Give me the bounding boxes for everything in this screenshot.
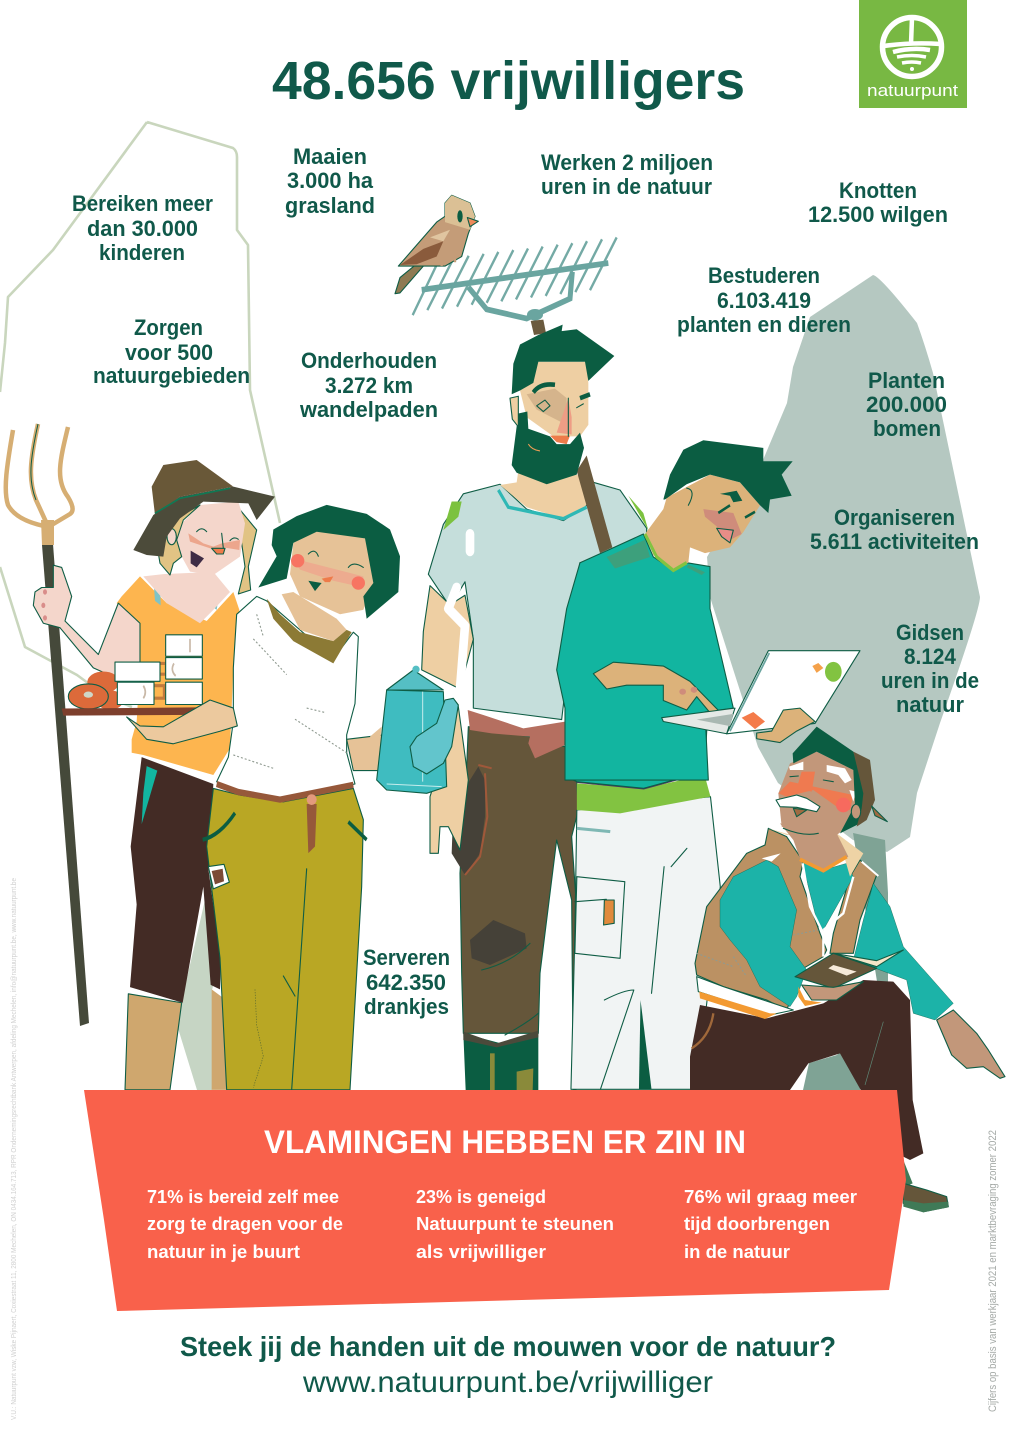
stat: Maaien: grasland [285,193,375,218]
ear [167,529,176,545]
website url: www.natuurpunt.be/vrijwilliger [302,1366,713,1399]
background shape: darker green block behind seated man [803,833,888,1090]
boots [125,989,227,1090]
illustration: blonde woman body [33,565,239,1090]
stat: Serveren: drankjes [364,994,449,1019]
stat: Onderhouden: Onderhouden [301,348,437,373]
column: 71%: zorg te dragen voor de [147,1214,343,1234]
stat: Serveren: Serveren [363,945,450,970]
illustration: blonde woman head with hat [133,460,275,594]
stat: Werken: Werken 2 miljoen [541,150,713,175]
column: 76%: tijd doorbrengen [684,1214,830,1234]
vest [695,828,877,1010]
t-shirt [428,471,648,720]
stat: Gidsen: 8.124 [904,644,957,669]
stat: Serveren: 642.350 [366,970,446,995]
dark trousers [130,757,221,1003]
column: 23%: Natuurpunt te steunen [416,1214,614,1234]
stat: Werken: uren in de natuur [541,174,712,199]
stat: Organiseren [810,505,979,554]
zip and collar [762,823,878,957]
tray with cups and donuts [62,635,222,716]
cuff [798,987,822,1006]
stat: Onderhouden: 3.272 km [325,373,413,398]
sweater bottom [565,697,709,788]
teal sweater, head and hair [557,440,793,780]
stat: Werken [541,150,713,199]
panel: vlamingen hebben er zin in [84,1090,906,1311]
head with beard [510,325,614,484]
head [776,752,863,835]
logo: natuurpunt [867,82,958,100]
kettle [370,666,458,793]
logo [859,0,967,108]
stat: Bestuderen: 6.103.419 [717,288,811,313]
green hair [258,505,400,619]
stat: Bestuderen [677,263,851,337]
illustration: bearded man [370,325,648,1090]
legal text: V.U.: Natuurpunt vzw, Wiske Pijnaert, Coxiestraat 11, 2800 Mechelen, ON 0434.164.713, RPR Ondernemingsrechtbank Antwerpen, afdeling Mechelen, info@natuurpunt.be, www.natuurpunt.be [9,878,18,1420]
stat: Gidsen [881,620,979,717]
stat: Gidsen: uren in de [881,668,979,693]
column: 71%: 71% is bereid zelf mee [147,1187,339,1207]
arm and fist [33,565,140,677]
column: 71% [147,1187,343,1262]
stat: Bereiken [72,191,213,265]
background shape: pale outline left [0,122,280,707]
rake [413,237,617,335]
brown trousers, belt and boot [452,710,578,1090]
stat: Knotten: Knotten [839,178,917,203]
sweater [720,860,953,1020]
stat: Onderhouden [299,348,438,422]
hand on hip [347,735,383,771]
face [177,502,245,575]
bird [395,195,478,294]
stat: Planten: bomen [873,416,941,441]
stat: Knotten: 12.500 wilgen [808,202,948,227]
column: 23%: 23% is geneigd [416,1187,546,1207]
hair at the back [233,502,257,594]
stat: Bereiken: dan 30.000 [87,216,198,241]
dark trousers [690,980,923,1160]
hat [133,460,275,557]
stat: Zorgen: Zorgen [134,315,203,340]
column: 71%: natuur in je buurt [147,1242,300,1262]
forearm [593,662,720,713]
stat: Planten: 200.000 [866,392,947,417]
hair at the front [157,505,200,575]
pitchfork [6,424,89,1026]
column: 76% [684,1187,857,1262]
column: 76%: in de natuur [684,1242,790,1262]
neck [143,572,230,623]
stat: Zorgen [93,315,250,388]
shoe [903,1160,948,1212]
column: 23% [416,1187,614,1262]
arm with steam [422,534,473,689]
arm around waist [127,700,237,744]
orange shirt [117,576,239,775]
stat: Organiseren: 5.611 activiteiten [810,529,979,554]
pointing hand [937,1010,1005,1078]
title: 48.656 vrijwilligers [272,51,745,111]
face of second woman [290,529,373,614]
background shape: grey-green blob right [707,275,980,852]
column: 76%: 76% wil graag meer [684,1187,857,1207]
cap with knot [793,727,887,833]
panel heading: VLAMINGEN HEBBEN ER ZIN IN [264,1124,746,1160]
book [795,950,903,988]
stat: Bestuderen: planten en dieren [677,312,851,337]
hand holding book [802,982,863,1000]
stat: Serveren [363,945,450,1019]
column: 23%: als vrijwilliger [416,1242,546,1262]
blue straps [153,579,220,610]
rake handle [577,456,612,553]
stat: Gidsen: Gidsen [896,620,964,645]
stat: Zorgen: voor 500 [125,340,213,365]
stat: Bereiken: kinderen [99,240,185,265]
stat: Bereiken: Bereiken meer [72,191,213,216]
stat: Maaien: Maaien [293,144,367,169]
white shirt with collar [217,592,358,800]
olive trousers [203,784,367,1090]
illustration: second woman and tray [62,505,400,1090]
stat: Zorgen: natuurgebieden [93,363,250,388]
stat: Gidsen: natuur [896,692,964,717]
call to action: Steek jij de handen uit de mouwen voor de natuur? [180,1331,836,1362]
hem [697,977,793,1019]
illustration: man with laptop [557,440,860,1089]
laptop [662,651,860,734]
hand under laptop [757,708,815,743]
stat: Maaien [285,144,375,218]
stat: Organiseren: Organiseren [834,505,955,530]
stat: Onderhouden: wandelpaden [299,397,438,422]
source note: Cijfers op basis van werkjaar 2021 en marktbevraging zomer 2022 [987,1130,999,1412]
stat: Planten: Planten [868,368,945,393]
stat: Planten [866,368,947,441]
illustration: seated older man with book [690,727,1005,1212]
stat: Maaien: 3.000 ha [287,168,374,193]
stat: Knotten [808,178,948,227]
hand [430,707,468,853]
illustration: rake with bird [395,195,617,335]
stat: Bestuderen: Bestuderen [708,263,820,288]
background shape: sage panel behind women [177,887,220,1090]
white trousers and lime band [571,772,720,1089]
